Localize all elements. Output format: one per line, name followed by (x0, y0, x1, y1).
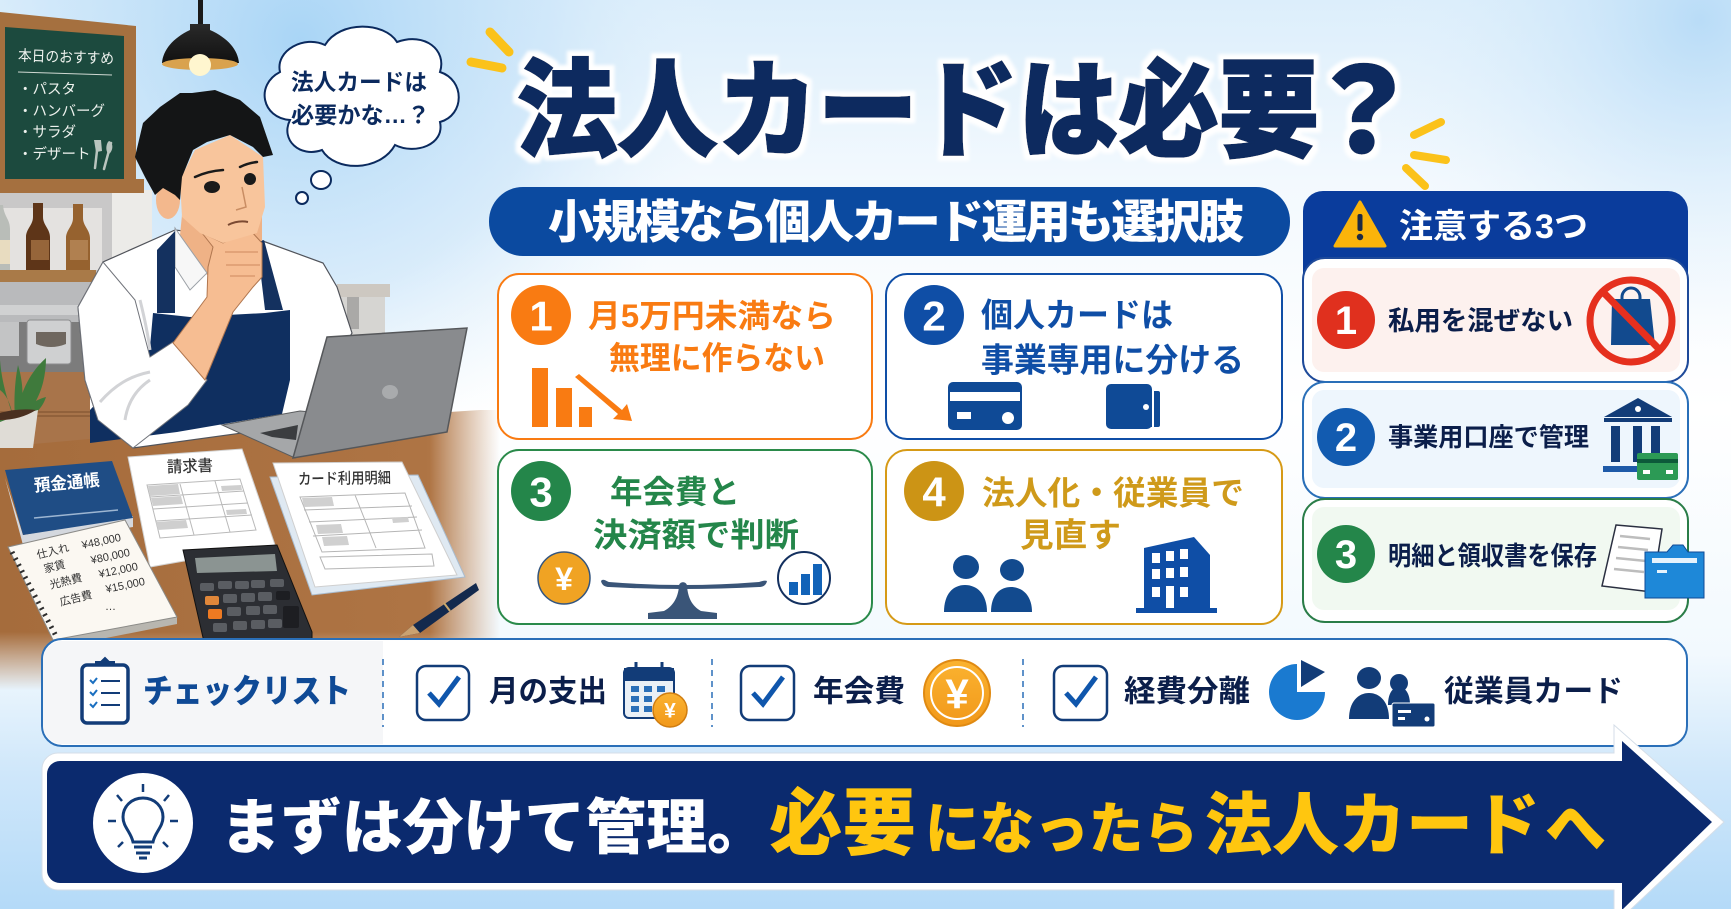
card 3 text: 決済額で判断 (593, 516, 799, 554)
hair (135, 90, 273, 200)
notebook with expenses: … (105, 601, 116, 613)
pendant lamp (162, 0, 239, 76)
invoice 請求書 (128, 449, 275, 567)
notebook with expenses: ¥12,000 (97, 561, 139, 581)
checklist bar (42, 639, 1687, 746)
arrow text yellow: へ (1545, 796, 1606, 862)
check item: employee card: 従業員カード (1444, 676, 1623, 708)
subtitle pill: 小規模なら個人カード運用も選択肢 (548, 196, 1244, 248)
shirt (78, 230, 352, 448)
panel: three cautions (1303, 191, 1704, 622)
thought bubble: 必要かな…？ (291, 102, 430, 128)
chalkboard menu: ・ハンバーグ (18, 103, 105, 120)
icon: office building (1136, 537, 1217, 613)
title: 法人カードは必要 (517, 53, 1319, 171)
card 2 text: 事業専用に分ける (981, 342, 1244, 378)
caution 2: 2 (1335, 416, 1357, 460)
notebook with expenses: 家賃 (42, 557, 67, 576)
passbook 預金通帳: 預金通帳 (33, 470, 101, 495)
caution 1: 1 (1335, 299, 1357, 343)
badge 2 (904, 285, 964, 345)
back wall and shelf (0, 190, 390, 450)
arrow text white: まずは分けて管理。 (220, 794, 768, 862)
pen (399, 583, 479, 637)
notebook with expenses: ¥15,000 (104, 576, 146, 596)
icon: falling bar chart (532, 368, 632, 427)
man in apron (78, 90, 352, 448)
card 2 (886, 274, 1282, 439)
panel header: 注意する3つ (1399, 208, 1588, 246)
badge 2: 2 (922, 292, 946, 340)
caution 3: 明細と領収書を保存 (1388, 541, 1597, 571)
badge 4 (904, 461, 964, 521)
notebook with expenses: ¥48,000 (80, 532, 122, 552)
caution 2: 事業用口座で管理 (1388, 424, 1589, 452)
arrow text yellow: になったら (925, 798, 1198, 860)
collar (175, 228, 207, 290)
check item: employee card (1349, 667, 1623, 727)
eyes brows mouth (204, 181, 220, 193)
notebook with expenses (8, 520, 177, 648)
badge 3: 3 (529, 468, 553, 516)
chalkboard menu: ・デザート (18, 145, 90, 163)
arrow text yellow: 法人カード (1205, 788, 1540, 864)
card 1 text: 月5万円未満なら (588, 298, 836, 334)
arrow text yellow: 必要 (769, 784, 916, 864)
icon: light bulb (93, 773, 193, 873)
sparkle accents left (471, 32, 509, 68)
caution 2 (1303, 382, 1688, 498)
card 1 text (588, 298, 836, 376)
notebook with expenses: 光熱費 (48, 570, 83, 592)
chalkboard menu: 本日のおすすめ (18, 48, 114, 68)
check item: annual fee: ¥ (945, 670, 969, 718)
icon: clipboard (82, 658, 128, 723)
check item: monthly spend (417, 662, 687, 727)
title: ？ (1305, 47, 1421, 177)
chalkboard menu: ・パスタ (18, 81, 76, 98)
card 3 (498, 450, 872, 624)
badge 3 (511, 461, 571, 521)
calculator (183, 545, 312, 642)
icon: bank with card (1603, 398, 1678, 480)
card 4 text: 見直す (1020, 516, 1121, 554)
icon: no shopping bag (1590, 280, 1672, 362)
icon: yen coin (538, 552, 590, 604)
card 2 text (981, 296, 1244, 378)
notebook with expenses: ¥80,000 (89, 547, 131, 567)
arrow text yellow (769, 784, 1606, 864)
icon: chart circle (778, 552, 830, 604)
caution 1 (1303, 258, 1688, 382)
badge 1: 1 (529, 292, 553, 340)
conclusion arrow (42, 725, 1724, 909)
icon: two people (944, 555, 1032, 612)
thought bubble: 法人カードは (291, 69, 427, 95)
badge 1 (511, 285, 571, 345)
icon: credit card (948, 382, 1022, 430)
check item: annual fee (741, 660, 990, 726)
chalkboard menu (0, 12, 144, 193)
card 4 (886, 450, 1282, 624)
card 4 text (982, 474, 1244, 554)
notebook with expenses: 広告費 (58, 587, 93, 609)
head (156, 188, 180, 219)
card 3 text: 年会費と (610, 474, 740, 510)
card statement カード利用明細: カード利用明細 (298, 469, 391, 488)
panel header (1303, 191, 1688, 280)
card statement カード利用明細 (270, 462, 465, 595)
card 2 text: 個人カードは (981, 296, 1173, 334)
chalkboard menu: ・サラダ (18, 124, 76, 141)
card 1 text: 無理に作らない (609, 340, 825, 376)
forearm and hand (173, 230, 262, 380)
check item: expense separation: 経費分離 (1124, 676, 1250, 708)
badge 4: 4 (922, 468, 946, 516)
card 4 text: 法人化・従業員で (982, 474, 1244, 512)
card 1 (498, 274, 872, 439)
check item: expense separation (1054, 660, 1325, 720)
icon: wallet (1106, 384, 1160, 429)
sleeve (78, 262, 207, 448)
neck (180, 215, 262, 275)
caution 3 (1303, 499, 1704, 622)
wooden desk (0, 410, 500, 690)
notebook with expenses: 仕入れ (35, 541, 70, 562)
icon: yen coin: ¥ (555, 561, 573, 597)
caution 3: 3 (1335, 533, 1357, 577)
icon: balance scale (601, 580, 767, 619)
thought bubble (265, 27, 459, 204)
illustration: cafe owner at desk (0, 0, 500, 690)
check item: monthly spend: 月の支出 (489, 676, 607, 708)
check item: annual fee: 年会費 (813, 676, 905, 708)
invoice 請求書: 請求書 (167, 457, 213, 476)
apron (157, 231, 283, 313)
passbook 預金通帳 (5, 461, 133, 545)
card 3 text (593, 474, 799, 554)
potted plant (0, 358, 46, 448)
sparkle accents right (1406, 122, 1446, 186)
check item: monthly spend: ¥ (664, 700, 676, 722)
caution 1: 私用を混ぜない (1388, 306, 1573, 336)
subtitle pill (489, 187, 1290, 256)
checklist heading: チェックリスト (143, 672, 351, 710)
icon: receipt and folder (1602, 525, 1704, 598)
laptop (222, 328, 467, 458)
